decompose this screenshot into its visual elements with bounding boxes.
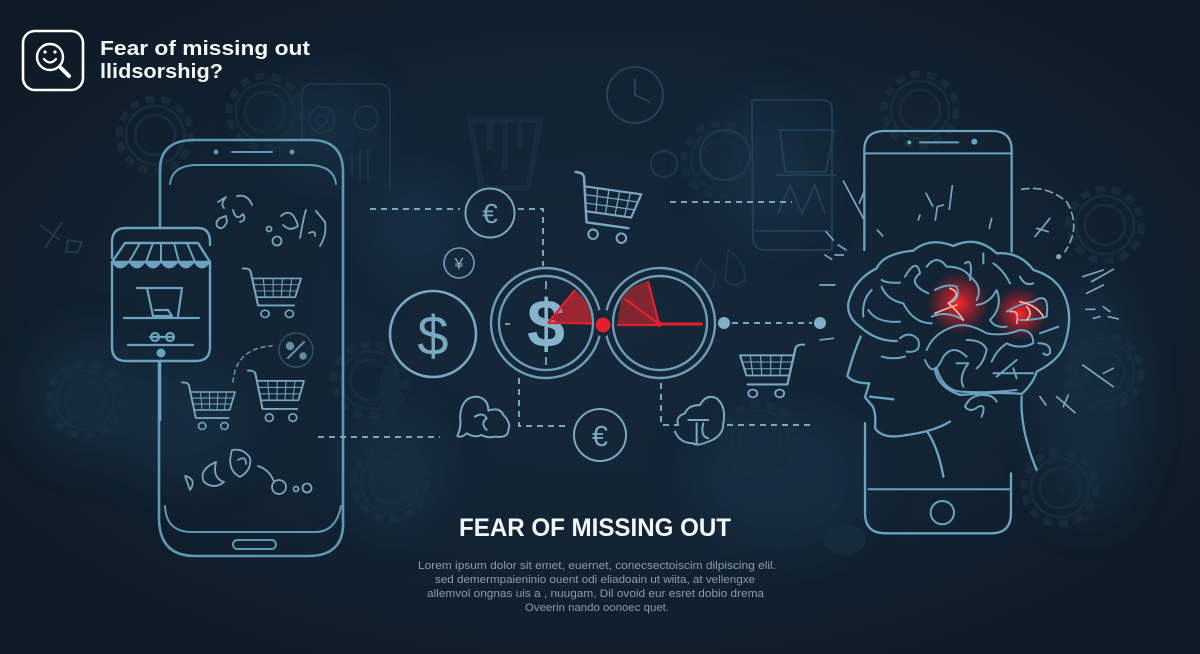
faint inner gears in back phone — [309, 106, 378, 180]
left ring — [491, 268, 601, 378]
lower coin — [574, 409, 626, 461]
main heading: FEAR OF MISSING OUT — [459, 514, 731, 542]
faint brains — [695, 250, 745, 291]
body paragraph: Oveerin nando oonoec quet. — [525, 602, 669, 614]
header title: llidsorshig? — [100, 61, 223, 83]
small percent coin — [444, 248, 474, 278]
body paragraph: sed demermpaieninio ouent odi eliadoain ut wiita, at vellengxe — [435, 574, 755, 586]
left red sector — [548, 290, 592, 325]
faint back phone left — [302, 84, 390, 190]
central rings gauge: $ — [527, 286, 565, 362]
centre red dot — [596, 318, 610, 332]
cart in store — [137, 288, 182, 316]
small percent coin: ¥ — [454, 256, 464, 273]
cart icons in phone — [182, 268, 304, 430]
faint clock — [607, 67, 663, 123]
connector end dots — [718, 317, 826, 329]
background glow patches — [30, 80, 1140, 550]
header logo icon — [23, 31, 83, 90]
phone frame — [159, 140, 343, 556]
central rings gauge — [491, 268, 715, 378]
euro coin — [466, 188, 514, 238]
percent badge — [279, 333, 313, 367]
ring gap — [594, 309, 612, 337]
motion ticks — [820, 181, 1118, 413]
left phone — [159, 140, 343, 556]
dashed connectors — [318, 202, 812, 437]
body paragraph — [418, 560, 776, 614]
glowing folds — [935, 288, 1043, 323]
header title — [100, 38, 310, 83]
body paragraph: Lorem ipsum dolor sit emet, euernet, conecsectoiscim dilpiscing elil. — [418, 560, 776, 572]
dashed arc — [233, 346, 272, 382]
brain outline — [848, 242, 1069, 395]
euro coin: € — [482, 198, 498, 229]
brain folds — [863, 253, 1058, 417]
body paragraph: allemvol ongnas uis a , nuugam, Dil ovoid eur esret dobio drema — [427, 588, 765, 600]
right phone and brain — [820, 131, 1118, 533]
connector stem — [159, 361, 161, 420]
right red sector — [617, 281, 659, 325]
faint background icons — [40, 67, 1141, 554]
header title: Fear of missing out — [100, 38, 310, 60]
cloud brain icon right — [675, 397, 724, 445]
faint back phone right with cart — [752, 100, 836, 250]
top shopping cart — [567, 172, 643, 245]
big dollar coin — [390, 291, 476, 377]
right shopping cart — [740, 345, 804, 397]
big dollar coin: $ — [417, 304, 449, 367]
glow spots — [927, 272, 990, 335]
faint percent doodle — [40, 222, 82, 252]
lower coin: € — [592, 421, 608, 453]
faint gauge — [651, 130, 750, 180]
doodles top — [216, 196, 325, 246]
storefront icon — [112, 228, 210, 420]
faint shopping bag — [470, 120, 540, 188]
right ring — [605, 268, 715, 378]
faint map pin and clouds — [380, 365, 865, 554]
faint gears — [49, 74, 1141, 524]
cloud brain icon left — [457, 397, 509, 437]
doodles bottom — [185, 450, 312, 494]
phone frame — [864, 131, 1012, 533]
head profile — [847, 337, 1037, 477]
